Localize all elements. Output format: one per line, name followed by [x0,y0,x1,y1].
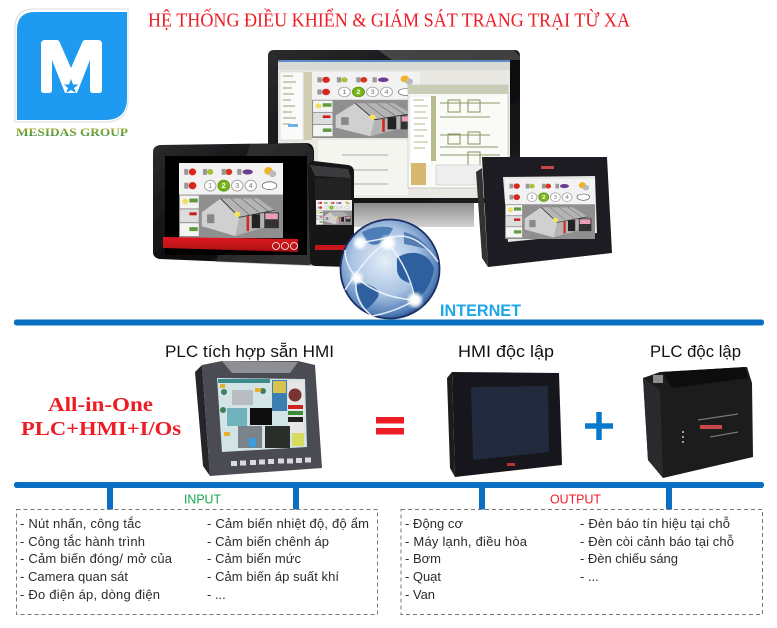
All-in-One label: PLC+HMI+I/Os [21,418,181,440]
connectors: output [479,487,672,510]
logo: Mesidas Group [15,9,128,139]
equals sign [376,417,404,434]
panel: output list: - Bơm [405,551,441,566]
panel: output list: - ... [580,569,599,584]
panel: input list: - Công tắc hành trình [20,534,145,549]
panel: output list: - Động cơ [405,516,463,531]
heading: PLC độc lập: PLC độc lập [650,342,741,361]
plus sign [585,412,613,440]
INPUT label: INPUT [184,492,221,506]
internet bus bar [14,320,764,326]
panel: output list [401,510,762,614]
panel: output list: - Quạt [405,569,441,584]
software ladder window [408,85,508,188]
standalone HMI [447,372,562,477]
panel: input list: - Nút nhấn, công tắc [20,516,142,531]
monitor [268,50,520,227]
panel: input list: - Đo điện áp, dòng điện [20,587,160,602]
integrated screen [217,378,307,452]
device: PLC with integrated HMI [195,361,322,476]
panel: output list: - Máy lạnh, điều hòa [405,534,528,549]
connectors: input [107,487,299,510]
tablet screen [179,163,283,238]
panel: input list: - Cảm biến áp suất khí [207,569,339,584]
smartphone [308,161,354,267]
I/O bus bar [14,482,764,488]
tablet [153,143,314,266]
panel: output list: - Đèn chiếu sáng [580,551,678,566]
industrial HMI panel [476,157,612,267]
title: HỆ THỐNG ĐIỀU KHIỂN & GIÁM SÁT TRANG TRẠI TỪ XA [148,8,630,32]
continents [397,253,434,297]
All-in-One label: All-in-One [48,394,153,416]
All-in-One label [21,394,181,440]
panel: input list: - Cảm biến nhiệt độ, độ ẩm [207,516,369,531]
panel: input list: - ... [207,587,226,602]
panel: input list: - Cảm biến chênh áp [207,534,329,549]
globe [340,220,440,318]
panel: input list [16,510,378,614]
phone screen [316,200,352,225]
heading: PLC tích hợp sẵn HMI: PLC tích hợp sẵn HMI [165,342,334,361]
heading: HMI độc lập: HMI độc lập [458,342,554,361]
icon: letter M [41,40,102,93]
panel screen [503,176,597,242]
panel: input list: - Cảm biến đóng/ mở của [20,551,173,566]
icon: star [64,79,78,93]
logo wordmark: MESIDAS GROUP [16,125,128,139]
standalone PLC [643,367,753,478]
panel: output list: - Đèn còi cảnh báo tại chỗ [580,534,734,549]
function keys [231,458,311,466]
panel: output list: - Van [405,587,435,602]
OUTPUT label: OUTPUT [550,492,601,506]
internet label: INTERNET [440,301,522,320]
monitor chin [320,203,474,227]
panel: input list: - Camera quan sát [20,569,128,584]
network arcs [345,236,438,316]
panel: input list: - Cảm biến mức [207,551,302,566]
monitor HMI window [312,72,420,138]
panel: output list: - Đèn báo tín hiệu tại chỗ [580,516,730,531]
